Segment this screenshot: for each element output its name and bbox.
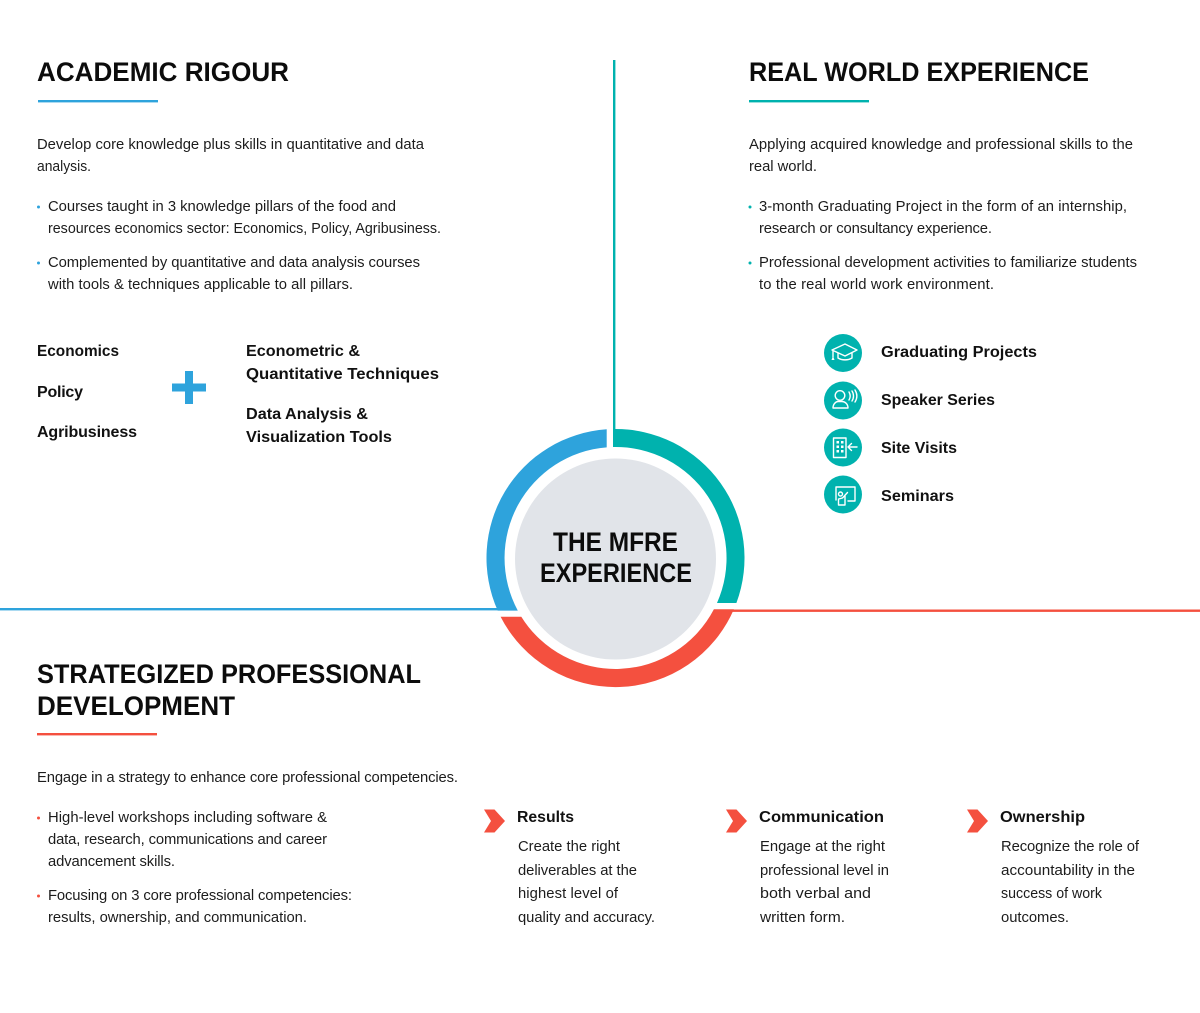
competency: communication: written form.: [759, 910, 845, 926]
activity: site visits: [824, 428, 957, 466]
panel: strategized professional development: [37, 659, 1140, 926]
bullet list: resources economics sector: Economics, Policy, Agribusiness.: [48, 221, 441, 237]
bullet list: research or consultancy experience.: [759, 221, 992, 237]
competency: ownership: accountability in the: [1001, 863, 1135, 879]
icon: chevron: [726, 810, 747, 832]
icon: presenter at board: [824, 476, 862, 514]
heading: real world experience: REAL WORLD EXPERIENCE: [749, 57, 1089, 87]
competency: results: quality and accuracy.: [518, 910, 655, 926]
activity: speaker series: [824, 382, 995, 420]
ring segment: blue: [486, 429, 607, 611]
centre circle: [515, 458, 716, 660]
bullet list: data, research, communications and career: [48, 832, 327, 848]
centre title: [540, 527, 692, 588]
bullet list: [37, 810, 352, 926]
competency: communication: professional level in: [760, 863, 889, 879]
tools and techniques: [246, 343, 439, 446]
heading: strategized professional development: STRATEGIZED PROFESSIONAL: [37, 659, 421, 689]
bullet list: to the real world work environment.: [759, 277, 994, 293]
bullet list: 3-month Graduating Project in the form of an internship,: [759, 199, 1127, 215]
competency: results: Create the right: [518, 839, 620, 855]
activity: site visits: Site Visits: [881, 440, 957, 457]
competency: communication: Communication: [759, 809, 884, 826]
activity: seminars: [824, 476, 954, 514]
competency: results: [484, 809, 655, 926]
heading rule: [37, 733, 157, 735]
bullet list: [748, 199, 1137, 293]
bullet list: Complemented by quantitative and data analysis courses: [48, 255, 420, 271]
tools and techniques: Econometric &: [246, 343, 360, 360]
intro text: Applying acquired knowledge and professional skills to the: [749, 137, 1133, 153]
heading: strategized professional development: [37, 659, 421, 721]
icon: speaker: [824, 382, 862, 420]
intro text: analysis.: [37, 159, 91, 175]
bullet list: results, ownership, and communication.: [48, 910, 307, 926]
competency: communication: both verbal and: [760, 886, 871, 902]
icon: graduation cap: [824, 334, 862, 372]
activity: speaker series: Speaker Series: [881, 392, 995, 409]
bullet list: High-level workshops including software &: [48, 810, 327, 826]
heading rule: [38, 100, 158, 102]
knowledge pillars: Policy: [37, 384, 83, 401]
knowledge pillars: Economics: [37, 343, 119, 360]
competency: ownership: Recognize the role of: [1001, 839, 1140, 855]
competency: communication: Engage at the right: [760, 839, 885, 855]
competency: ownership: [967, 809, 1140, 926]
activity: graduating projects: Graduating Projects: [881, 344, 1037, 361]
bullet list: Professional development activities to familiarize students: [759, 255, 1137, 271]
centre title: EXPERIENCE: [540, 558, 692, 588]
activity: seminars: Seminars: [881, 488, 954, 505]
competency: results: highest level of: [518, 886, 619, 902]
competency: ownership: outcomes.: [1001, 910, 1069, 926]
tools and techniques: Quantitative Techniques: [246, 366, 439, 383]
heading: academic rigour: ACADEMIC RIGOUR: [37, 57, 289, 87]
bullet list: [37, 199, 441, 293]
intro text: Engage in a strategy to enhance core professional competencies.: [37, 770, 458, 786]
heading rule: [749, 100, 869, 102]
intro text: Develop core knowledge plus skills in quantitative and data: [37, 137, 425, 153]
knowledge pillars: [37, 343, 137, 441]
central ring diagram: [486, 429, 745, 687]
centre title: THE MFRE: [553, 527, 678, 557]
bullet list: with tools & techniques applicable to all pillars.: [47, 277, 353, 293]
knowledge pillars: Agribusiness: [37, 424, 137, 441]
intro text: real world.: [749, 159, 817, 175]
bullet list: Focusing on 3 core professional competencies:: [48, 888, 352, 904]
heading: strategized professional development: DEVELOPMENT: [37, 691, 235, 721]
tools and techniques: Visualization Tools: [246, 429, 392, 446]
competency: results: Results: [517, 809, 574, 826]
competency: communication: [726, 809, 889, 926]
competency: ownership: Ownership: [1000, 809, 1085, 826]
icon: building with arrow: [824, 428, 862, 466]
ring segment: red: [501, 609, 734, 687]
intro text: [749, 137, 1133, 175]
intro text: [37, 137, 425, 175]
activity: graduating projects: [824, 334, 1037, 372]
ring segment: teal: [613, 429, 745, 603]
icon: chevron: [484, 810, 505, 832]
panel: academic rigour: [37, 57, 441, 446]
icon: plus: [172, 371, 206, 404]
icon: chevron: [967, 810, 988, 832]
bullet list: Courses taught in 3 knowledge pillars of the food and: [48, 199, 396, 215]
panel: real world experience: [748, 57, 1137, 514]
competency: results: deliverables at the: [518, 863, 637, 879]
tools and techniques: Data Analysis &: [246, 406, 368, 423]
bullet list: advancement skills.: [48, 854, 175, 870]
competency: ownership: success of work: [1001, 886, 1103, 902]
